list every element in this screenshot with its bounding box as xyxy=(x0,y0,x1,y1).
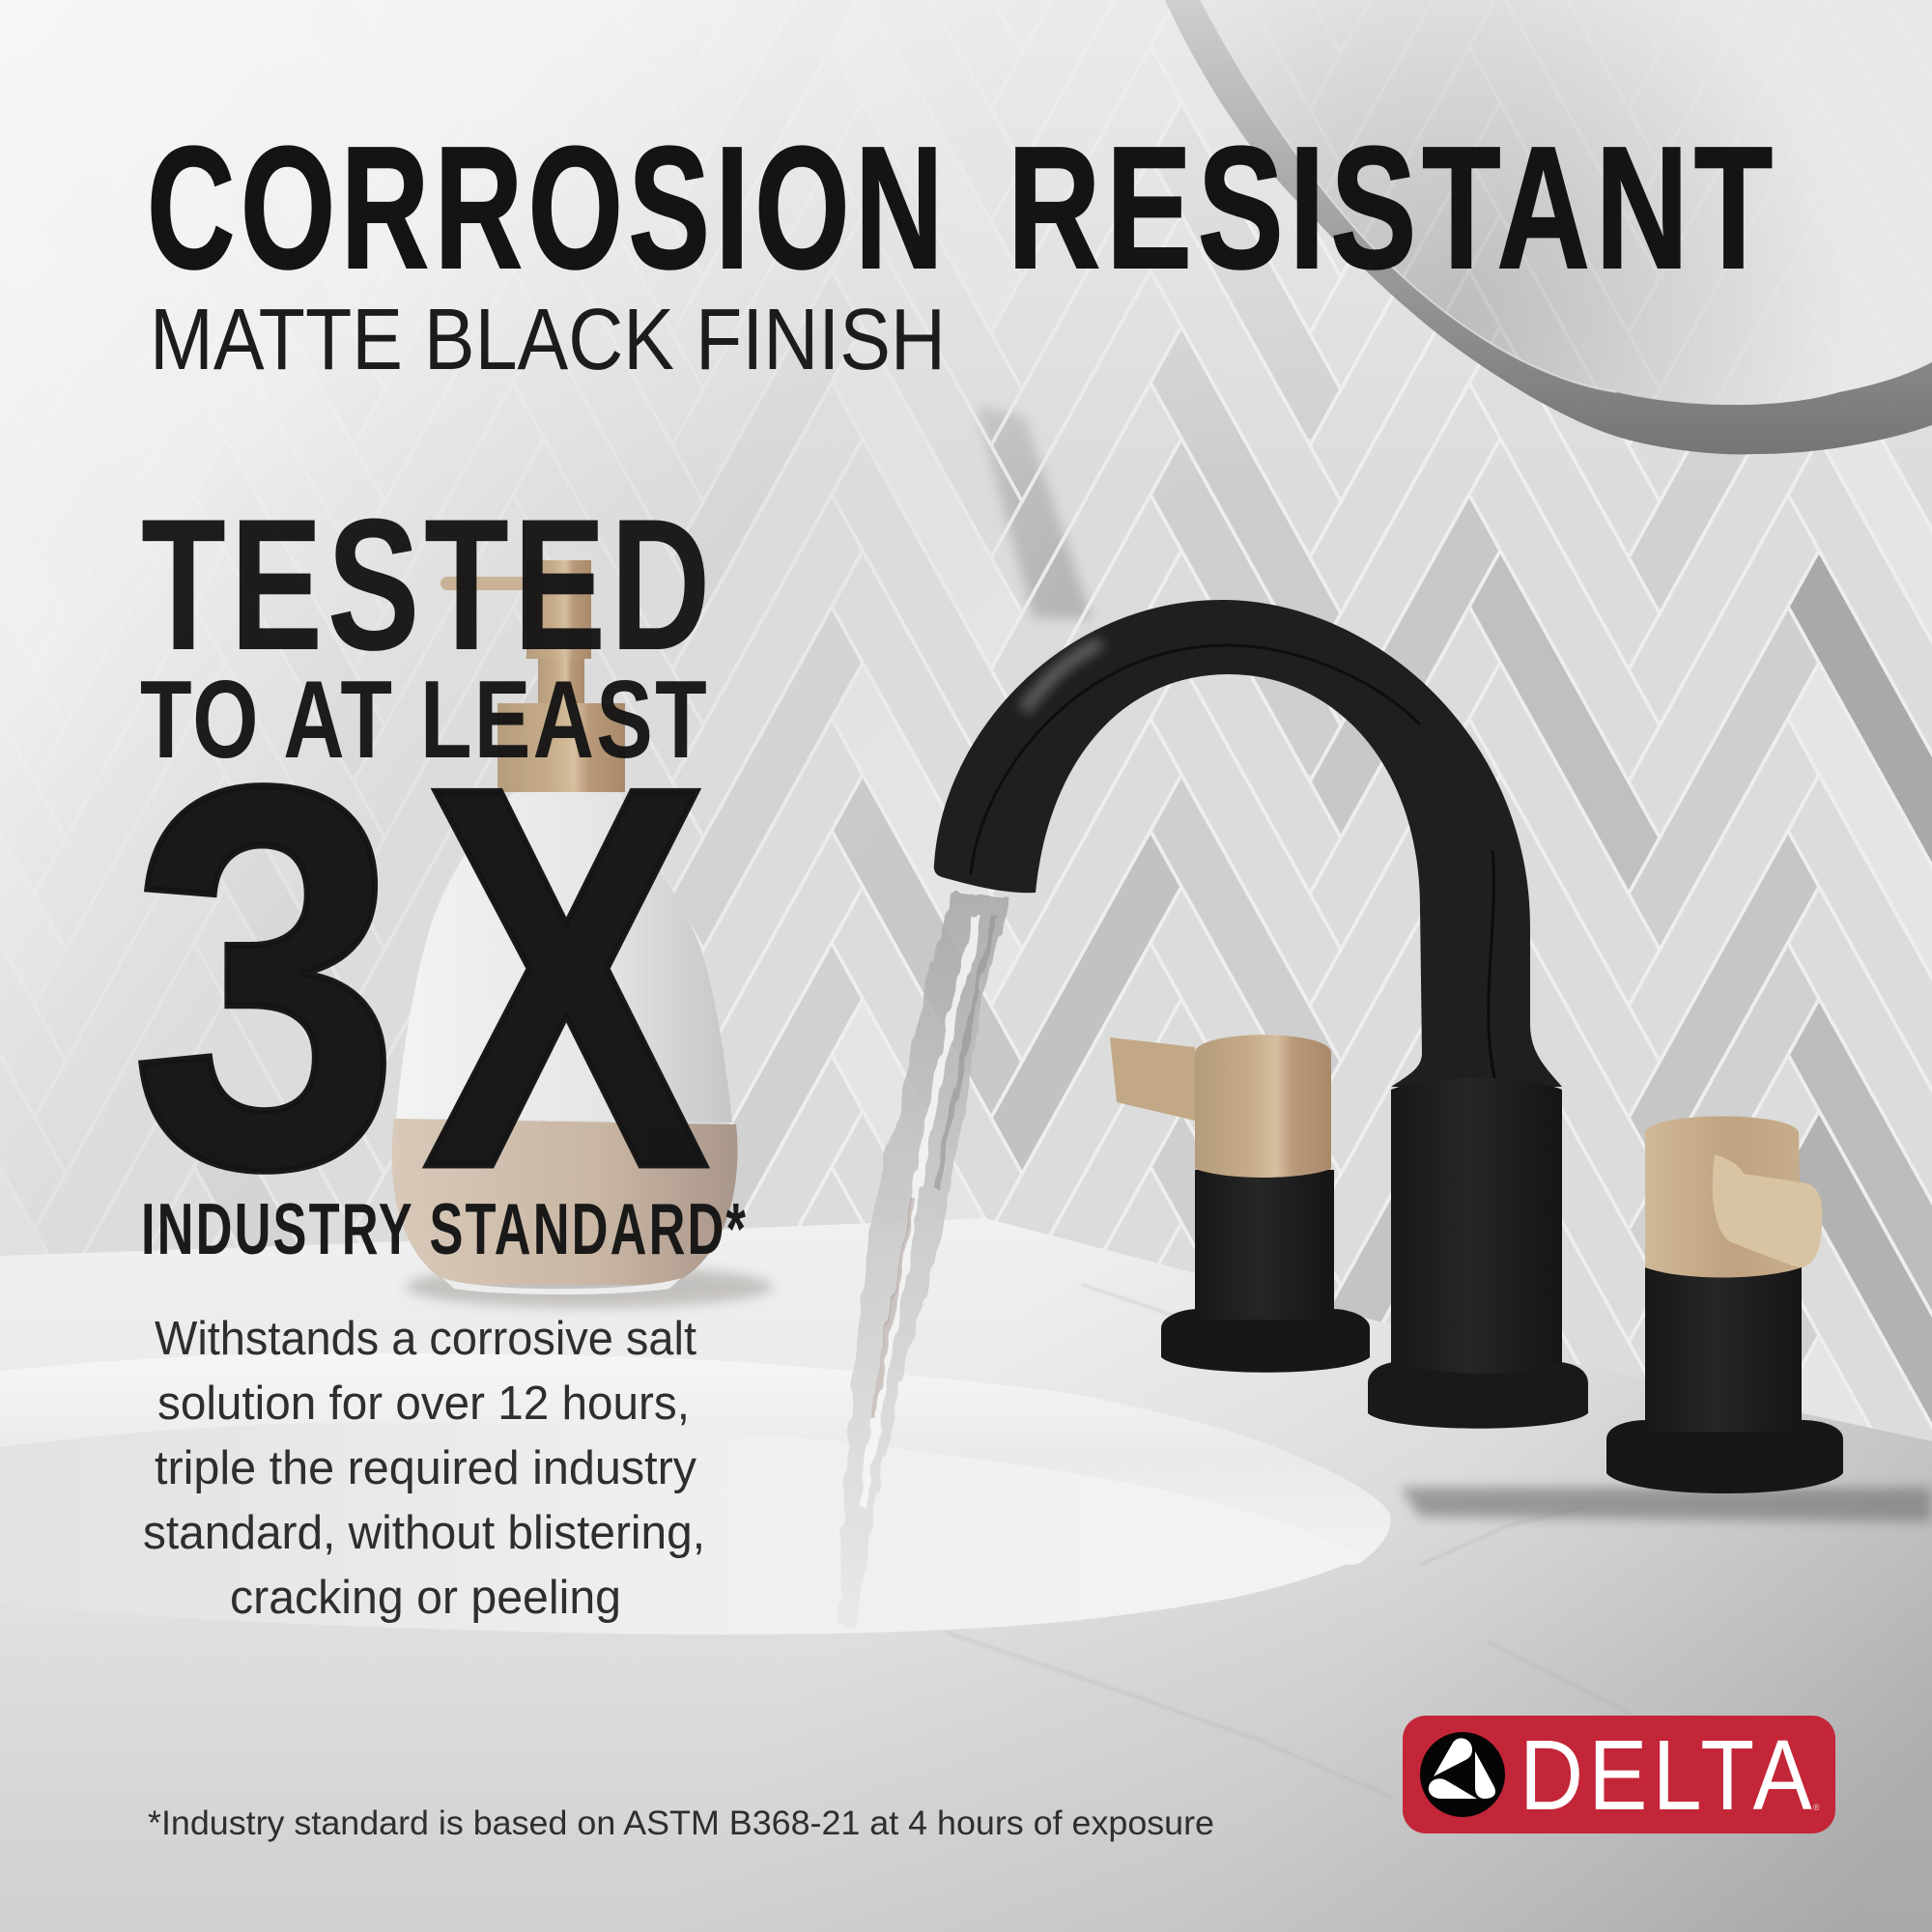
marble counter xyxy=(0,1218,1932,1932)
body text: cracking or peeling xyxy=(230,1572,621,1624)
title: CORROSION xyxy=(147,111,949,305)
body text: solution for over 12 hours, xyxy=(157,1378,690,1430)
body text xyxy=(143,1313,705,1624)
title xyxy=(147,111,1778,305)
spout arc xyxy=(934,600,1562,1087)
footnote: *Industry standard is based on ASTM B368-21 at 4 hours of exposure xyxy=(148,1804,1214,1842)
subtitle: MATTE BLACK FINISH xyxy=(150,292,946,388)
big number: 3X: X xyxy=(423,674,711,1281)
body text: Withstands a corrosive salt xyxy=(155,1313,696,1365)
Delta logo xyxy=(1403,1716,1835,1833)
left handle xyxy=(1110,1035,1370,1373)
background: tiled wall xyxy=(0,0,1932,1454)
headline: industry standard: INDUSTRY STANDARD* xyxy=(141,1188,748,1269)
body text: triple the required industry xyxy=(155,1442,696,1494)
mirror with frame xyxy=(1165,0,1932,454)
soap dispenser xyxy=(392,560,773,1308)
sink rim xyxy=(0,1352,1391,1565)
faucet foot xyxy=(1368,1362,1588,1429)
sink bowl xyxy=(0,1423,1360,1634)
right handle xyxy=(1606,1117,1843,1493)
faucet xyxy=(934,600,1843,1493)
sink basin xyxy=(0,1352,1391,1634)
wordmark: DELTA xyxy=(1520,1719,1817,1831)
body text: standard, without blistering, xyxy=(143,1507,705,1559)
faucet body xyxy=(1391,1078,1562,1379)
big number: 3X xyxy=(130,674,711,1281)
faucet shadow on counter xyxy=(1401,1488,1932,1521)
water stream xyxy=(838,891,1009,1627)
headline: to at least: TO AT LEAST xyxy=(140,659,709,781)
headline: tested: TESTED xyxy=(141,480,715,690)
icon: delta triangle mark xyxy=(1420,1732,1505,1817)
registered mark: ® xyxy=(1813,1803,1820,1812)
big number: 3X: 3 xyxy=(130,674,401,1281)
